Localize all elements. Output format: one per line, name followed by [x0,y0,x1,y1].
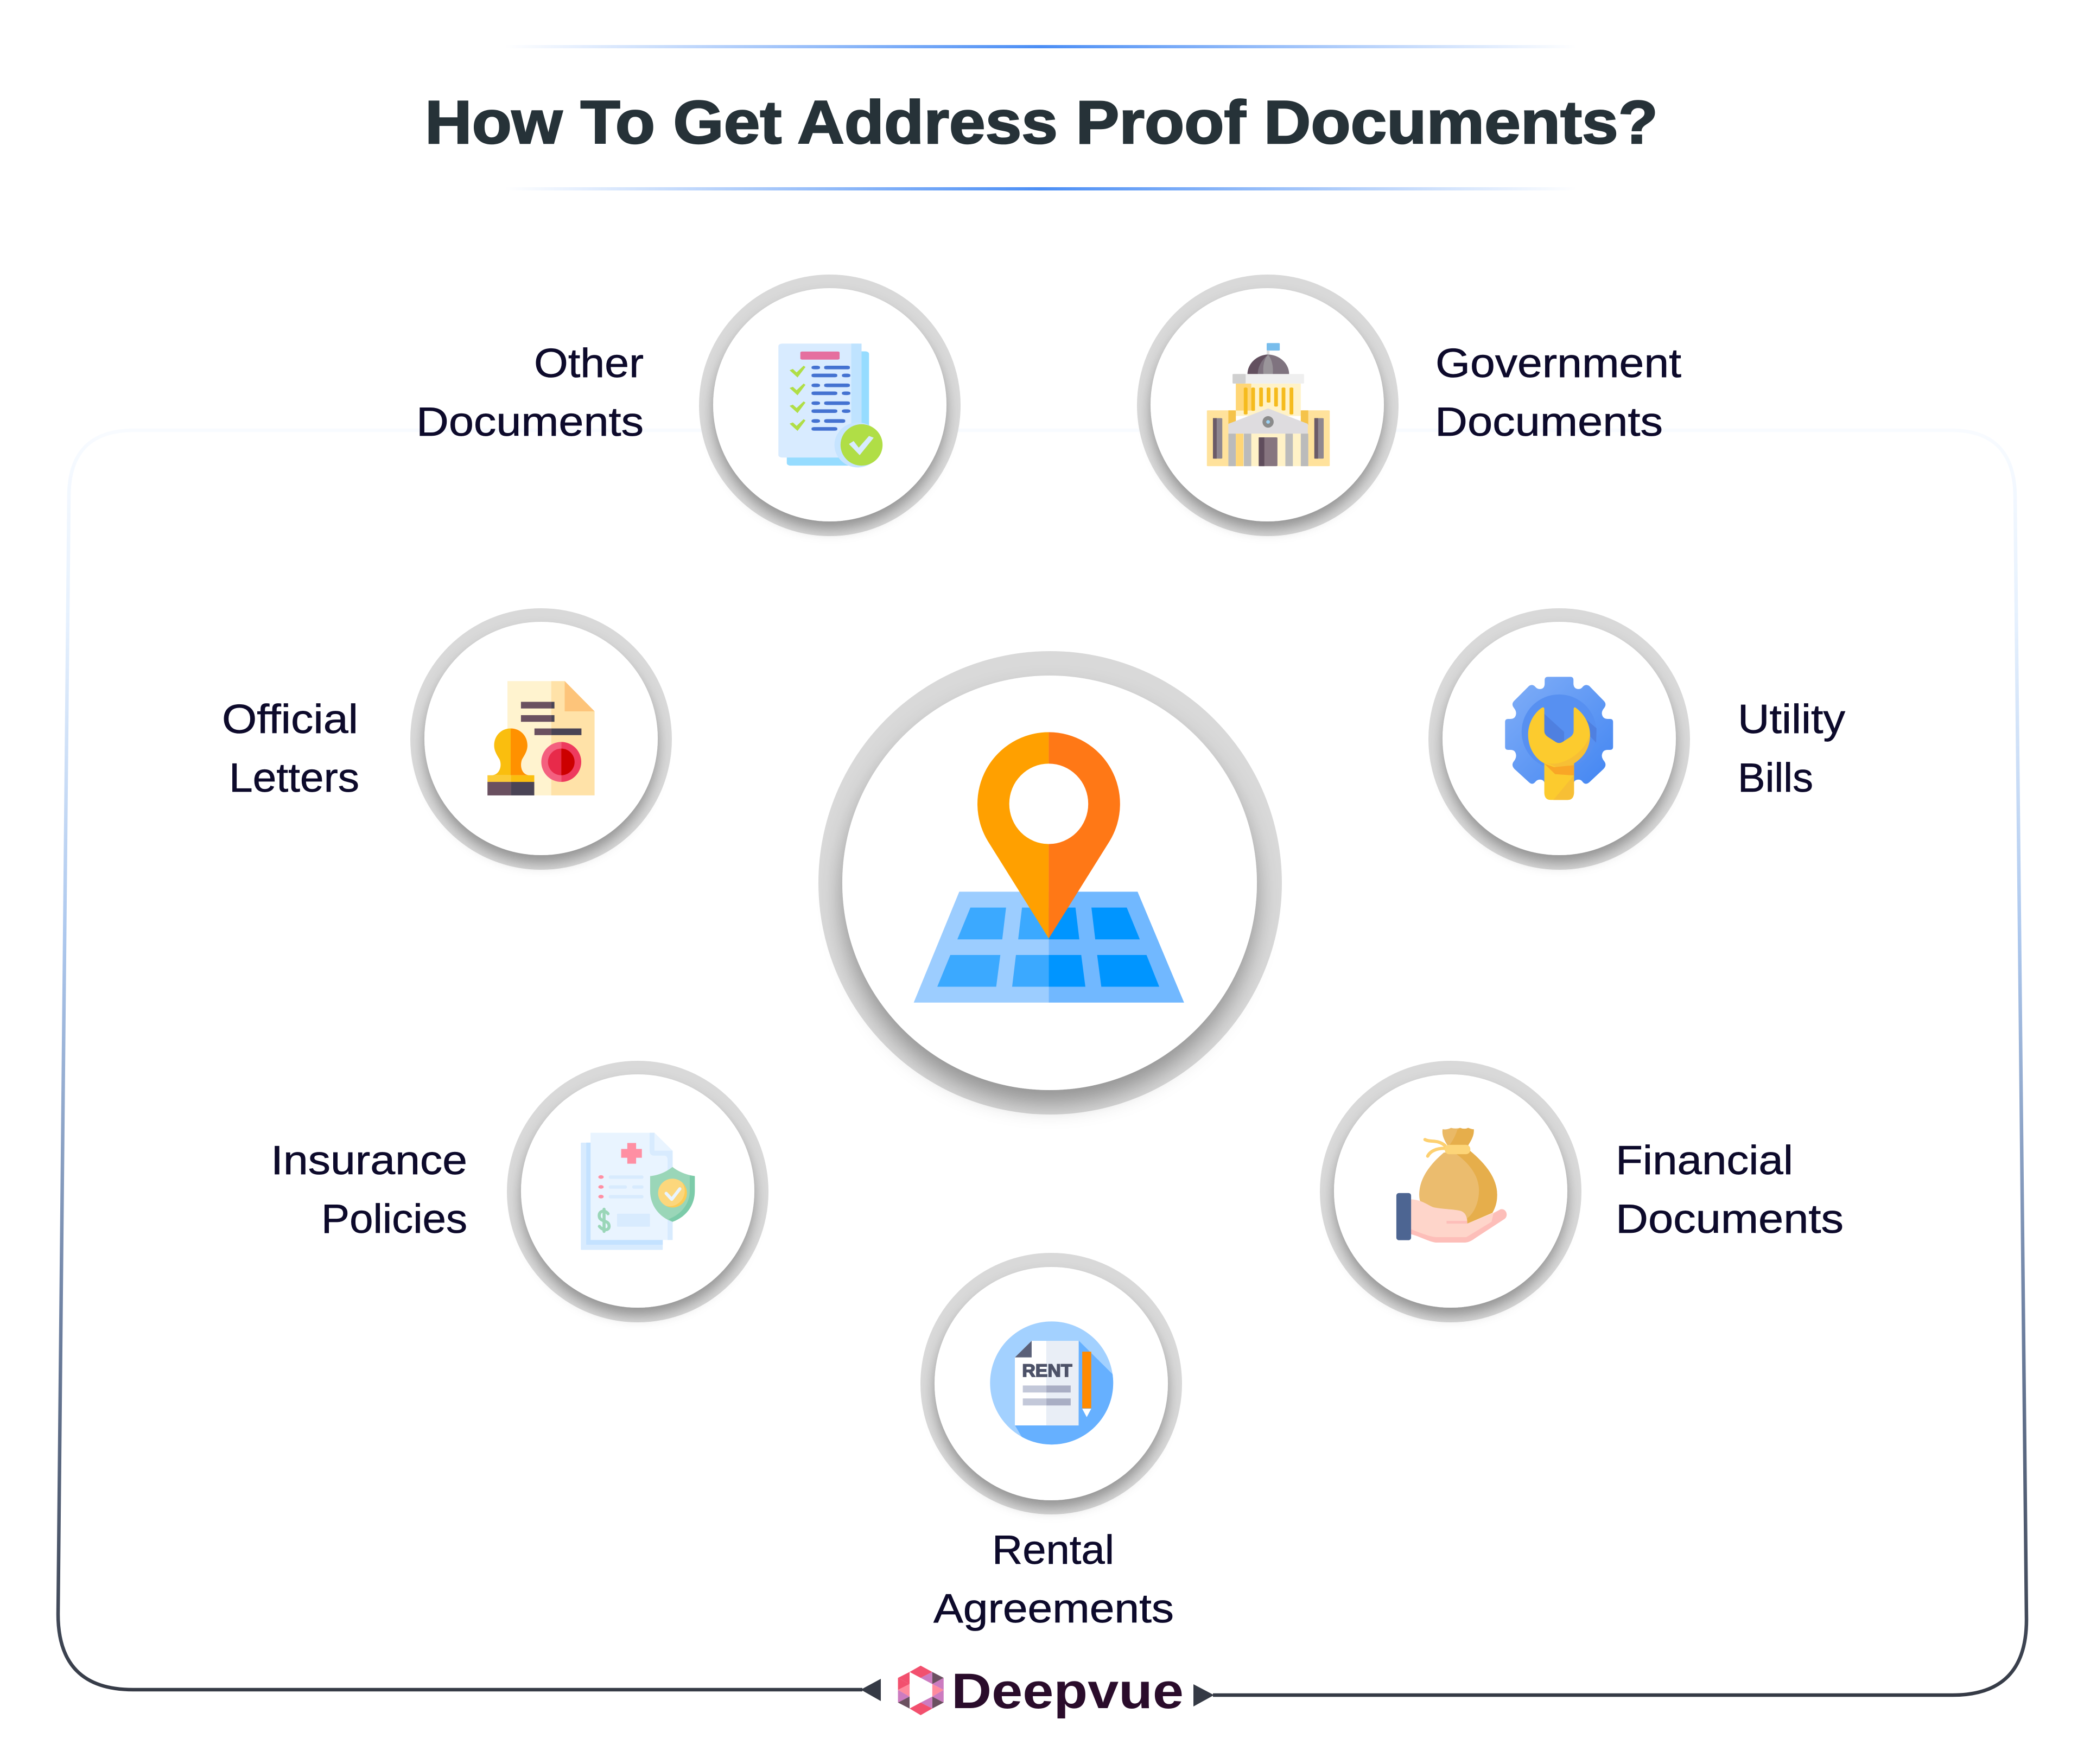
label: Documents [1435,399,1663,444]
panel: financial documents [1320,1061,1844,1322]
icon: government building [1207,343,1330,466]
logo: Deepvue [898,1664,1184,1719]
label: Bills [1738,755,1813,800]
ring [1428,608,1690,870]
label: Rental [992,1527,1114,1572]
ring [1320,1061,1581,1322]
ring [920,1253,1182,1514]
label: Documents [416,399,644,444]
label: Insurance [271,1137,467,1183]
icon: rent document [990,1321,1128,1464]
panel: insurance policies [271,1061,768,1322]
ring [699,275,961,536]
icon: map pin [914,732,1184,1003]
label: Government [1435,340,1681,386]
label: Documents [1616,1196,1844,1241]
icon: checklist [778,343,882,467]
icon: insurance document [581,1133,695,1250]
label: Utility [1738,696,1846,742]
label: Agreements [933,1585,1174,1631]
label: Official [222,696,358,742]
panel: utility bills [1428,608,1846,870]
arrow: right [1193,1684,1214,1706]
label [1435,340,1681,444]
icon: gear and wrench [1505,677,1613,800]
arrow: left [861,1679,881,1701]
label [222,696,359,800]
central ring [818,651,1282,1115]
frame outline [58,430,2026,1695]
label [1616,1137,1844,1241]
label [271,1137,467,1241]
icon: hexagon mark [898,1666,944,1715]
icon: rent document: RENT [1022,1361,1072,1380]
top title rule [505,45,1577,48]
bottom title rule [505,187,1577,190]
panel: other documents [416,275,961,536]
title: How To Get Address Proof Documents? [425,88,1658,156]
panel: central location [818,651,1282,1115]
wordmark: Deepvue [951,1664,1184,1719]
label: Financial [1616,1137,1793,1183]
label: Policies [321,1196,467,1241]
ring [1137,275,1399,536]
label [933,1527,1174,1631]
panel: government documents [1137,275,1681,536]
ring [507,1061,768,1322]
label: Letters [229,755,359,800]
panel: rental agreements [920,1253,1182,1631]
icon: stamped letter [487,681,595,795]
label [416,340,644,444]
label [1738,696,1846,800]
icon: money bag on hand [1396,1128,1507,1243]
ring [410,608,672,870]
panel: official letters [222,608,672,870]
label: Other [534,340,644,386]
